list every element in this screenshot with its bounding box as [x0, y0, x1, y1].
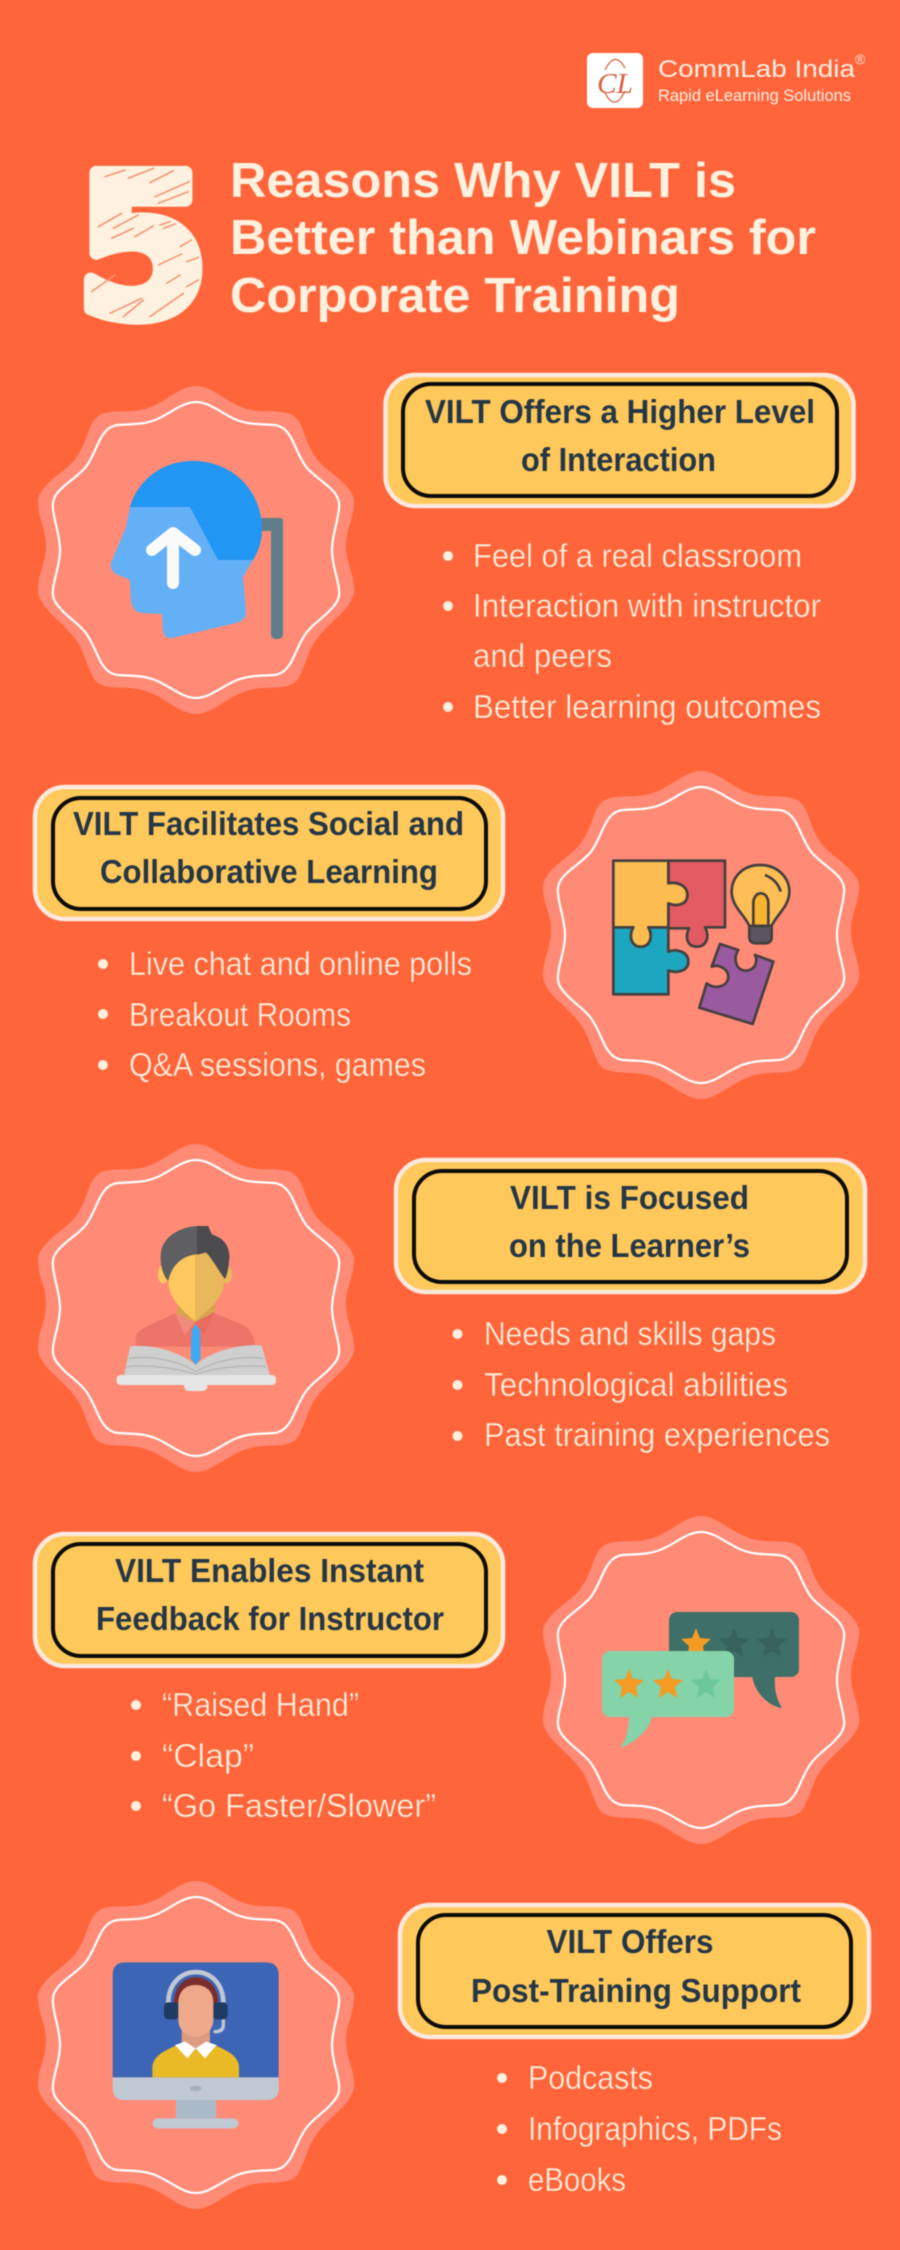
bullet list 3: Technological abilities	[484, 1366, 788, 1403]
heading box 4: Feedback for Instructor	[96, 1601, 444, 1638]
panel: post-training support	[38, 1881, 869, 2209]
bullet list 4: “Raised Hand”	[162, 1686, 359, 1723]
bullet list 5: Podcasts	[528, 2059, 653, 2096]
logo: CommLab India: CL	[597, 68, 633, 100]
badge 3	[38, 1144, 354, 1472]
heading box 5	[400, 1905, 869, 2037]
icon: head with up arrow	[111, 461, 283, 639]
bullet list 2: Live chat and online polls	[129, 945, 472, 982]
bullet list 3: Needs and skills gaps	[484, 1315, 776, 1352]
icon: instructor with headset on monitor	[113, 1962, 279, 2128]
bullet list 5	[497, 2059, 782, 2198]
bullet list 4: “Go Faster/Slower”	[162, 1787, 436, 1824]
heading box 3: on the Learner’s	[509, 1228, 750, 1265]
title	[230, 154, 816, 323]
heading box 3: VILT is Focused	[510, 1180, 749, 1217]
icon: rating chat bubbles	[602, 1612, 799, 1748]
icon: learner reading a book	[117, 1226, 276, 1391]
heading box 1	[386, 375, 854, 506]
heading box 1: of Interaction	[521, 442, 716, 479]
logo: CommLab India: Rapid eLearning Solutions	[658, 87, 851, 105]
panel: higher level of interaction	[38, 375, 853, 725]
badge 5	[38, 1881, 354, 2209]
bullet list 1: Interaction with instructor	[473, 587, 821, 624]
bullet list 3: Past training experiences	[484, 1416, 830, 1453]
heading box 2	[35, 787, 503, 919]
panel: instant feedback for instructor	[35, 1516, 859, 1844]
badge 2	[543, 771, 859, 1099]
logo: CommLab India: ®	[855, 51, 866, 67]
heading box 4	[35, 1534, 503, 1666]
heading box 5: VILT Offers	[546, 1924, 714, 1961]
logo: CommLab India: CommLab India	[658, 56, 856, 83]
title: Better than Webinars for	[230, 211, 816, 265]
heading box 3	[396, 1160, 865, 1292]
bullet list 4	[131, 1686, 436, 1824]
big hand-drawn number 5: 5	[76, 134, 209, 361]
badge 4	[543, 1516, 859, 1844]
icon: puzzle pieces and light bulb	[613, 861, 789, 1024]
bullet list 1	[443, 537, 821, 725]
bullet list 5: Infographics, PDFs	[528, 2110, 782, 2147]
title: Reasons Why VILT is	[230, 154, 736, 208]
bullet list 3	[452, 1315, 830, 1453]
bullet list 2	[98, 945, 472, 1083]
heading box 1: VILT Offers a Higher Level	[425, 394, 815, 431]
panel: social and collaborative learning	[35, 771, 859, 1099]
logo: CommLab India	[587, 51, 866, 108]
heading box 4: VILT Enables Instant	[115, 1553, 424, 1590]
bullet list 4: “Clap”	[162, 1737, 254, 1774]
bullet list 5: eBooks	[528, 2161, 626, 2198]
panel: focused on the learner	[38, 1144, 865, 1472]
heading box 5: Post-Training Support	[471, 1973, 801, 2010]
bullet list 1: Feel of a real classroom	[473, 537, 802, 574]
bullet list 2: Breakout Rooms	[129, 996, 351, 1033]
badge 1	[38, 386, 354, 714]
title: Corporate Training	[230, 269, 680, 323]
bullet list 1: Better learning outcomes	[473, 688, 821, 725]
heading box 2: Collaborative Learning	[100, 854, 438, 891]
bullet list 2: Q&A sessions, games	[129, 1046, 426, 1083]
heading box 2: VILT Facilitates Social and	[73, 806, 464, 843]
bullet list 1: and peers	[473, 637, 612, 674]
